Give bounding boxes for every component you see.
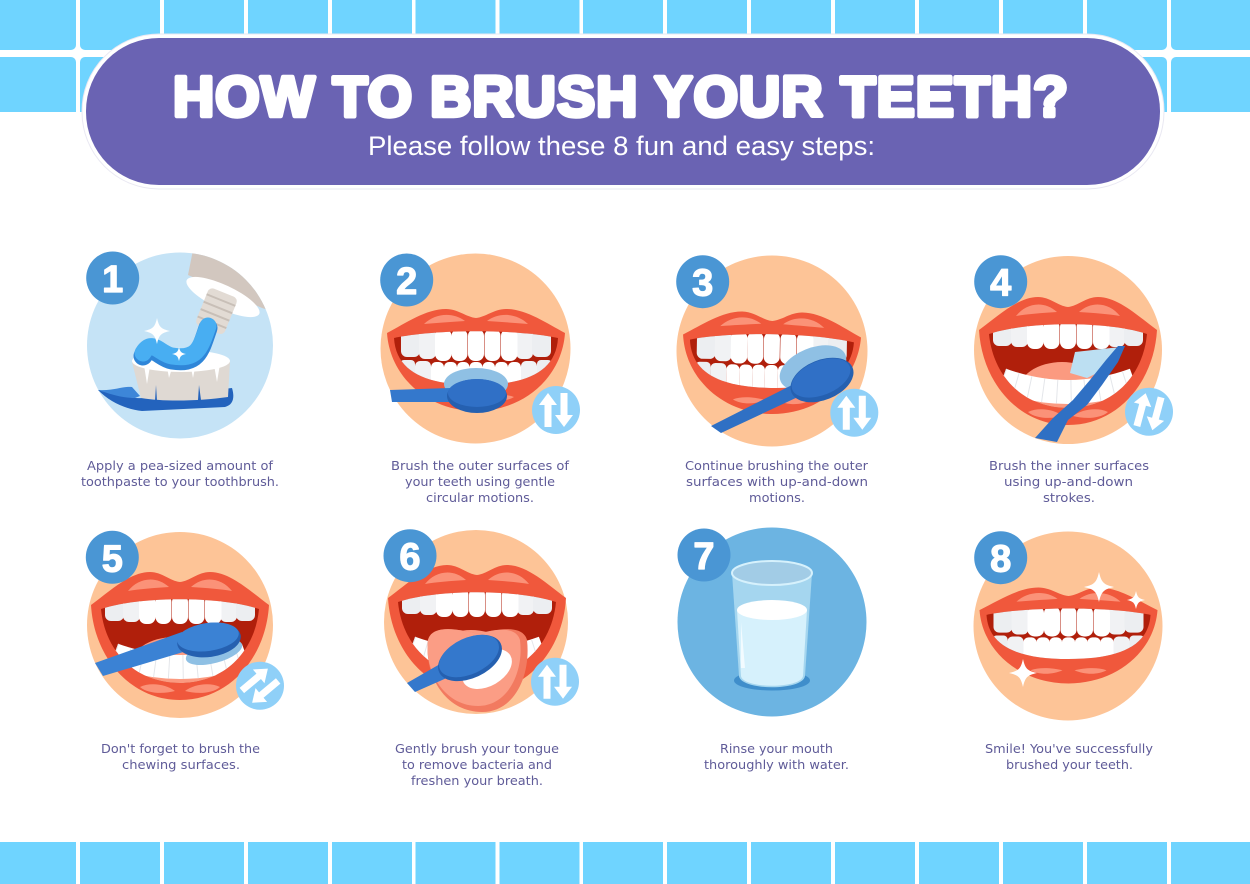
icon: smiling mouth xyxy=(682,310,861,416)
icon: open mouth xyxy=(91,572,269,700)
step 1: apply toothpaste xyxy=(81,250,279,489)
badge: 3: 3 xyxy=(692,263,713,305)
badge: 3 xyxy=(676,255,729,308)
caption: Apply a pea-sized amount of xyxy=(87,459,274,473)
step 7: rinse xyxy=(678,528,866,772)
badge: 1 xyxy=(86,252,139,304)
step 6: tongue xyxy=(384,529,579,788)
icon: toothbrush xyxy=(390,368,508,413)
icon: toothbrush xyxy=(711,336,860,433)
header banner xyxy=(82,34,1164,189)
badge: 2 xyxy=(380,254,433,306)
badge: 8: 8 xyxy=(990,539,1011,581)
badge: 4 xyxy=(974,255,1027,308)
icon: arrows xyxy=(830,389,878,437)
caption xyxy=(704,742,849,772)
icon: glass of water xyxy=(732,561,812,690)
caption: Brush the outer surfaces of xyxy=(391,459,570,473)
badge: 4: 4 xyxy=(990,263,1011,305)
caption xyxy=(685,459,868,505)
badge: 6 xyxy=(384,529,436,582)
step 8: smile xyxy=(974,531,1162,772)
icon: toothbrush xyxy=(1035,346,1125,442)
caption: Don't forget to brush the xyxy=(101,742,260,756)
caption: Rinse your mouth xyxy=(720,742,833,756)
icon: arrows xyxy=(531,658,579,706)
caption: your teeth using gentle xyxy=(405,475,555,489)
badge: 7: 7 xyxy=(693,536,715,578)
top tile band xyxy=(0,0,1250,127)
caption: circular motions. xyxy=(426,491,534,505)
icon: arrows xyxy=(532,386,580,434)
icon: arrows xyxy=(236,662,284,710)
caption: motions. xyxy=(749,491,805,505)
caption: using up-and-down xyxy=(1004,475,1133,489)
icon: toothbrush with paste xyxy=(98,318,233,411)
badge: 6: 6 xyxy=(399,537,421,579)
badge: 5 xyxy=(86,531,139,584)
icon: toothbrush xyxy=(407,626,519,697)
icon: tongue xyxy=(428,629,528,712)
step 3: up-and-down outer xyxy=(676,255,878,505)
step 4: inner surfaces xyxy=(974,255,1173,505)
icon: open mouth xyxy=(979,297,1157,425)
caption: freshen your breath. xyxy=(411,774,543,788)
caption: Continue brushing the outer xyxy=(685,459,868,473)
icon: smiling mouth xyxy=(980,588,1158,683)
caption: strokes. xyxy=(1043,491,1095,505)
caption: thoroughly with water. xyxy=(704,758,849,772)
icon: sparkles xyxy=(1009,572,1145,687)
caption: Gently brush your tongue xyxy=(395,742,559,756)
caption: surfaces with up-and-down xyxy=(686,475,868,489)
icon: toothbrush xyxy=(95,619,245,676)
caption: to remove bacteria and xyxy=(402,758,552,772)
caption xyxy=(985,742,1153,772)
subtitle: Please follow these 8 fun and easy steps: xyxy=(368,131,875,161)
caption: toothpaste to your toothbrush. xyxy=(81,475,279,489)
caption xyxy=(101,742,260,772)
caption xyxy=(395,742,559,788)
caption xyxy=(81,459,279,489)
badge: 5: 5 xyxy=(102,538,123,580)
step 2: outer surfaces circular xyxy=(380,254,580,505)
caption xyxy=(391,459,570,505)
badge: 2: 2 xyxy=(396,261,417,303)
icon: toothpaste tube xyxy=(186,253,266,334)
icon: smiling mouth xyxy=(387,309,565,411)
badge: 8 xyxy=(974,531,1027,584)
step 5: chewing surfaces xyxy=(86,531,284,772)
badge: 1: 1 xyxy=(102,259,123,301)
badge: 7 xyxy=(678,528,730,582)
caption: Smile! You've successfully xyxy=(985,742,1153,756)
caption xyxy=(989,459,1149,505)
icon: arrows xyxy=(1125,388,1173,436)
bottom tile band xyxy=(0,842,1250,884)
caption: Brush the inner surfaces xyxy=(989,459,1149,473)
title: HOW TO BRUSH YOUR TEETH? xyxy=(173,65,1068,129)
caption: brushed your teeth. xyxy=(1006,758,1133,772)
icon: open mouth xyxy=(388,565,566,693)
caption: chewing surfaces. xyxy=(122,758,240,772)
